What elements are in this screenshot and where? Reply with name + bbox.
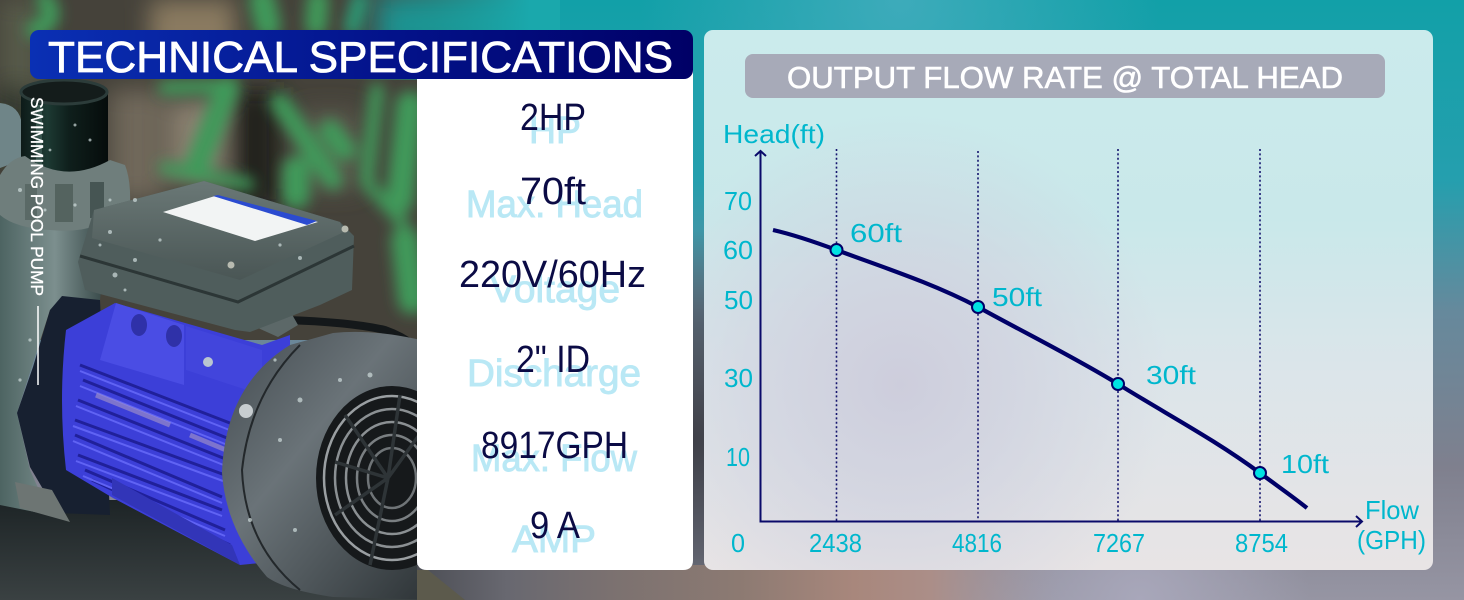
spec row: amperage: AMP xyxy=(512,519,596,561)
clear strainer lid xyxy=(0,103,22,168)
point labels: 30ft xyxy=(1146,360,1197,390)
cable xyxy=(293,316,410,338)
point labels: 50ft xyxy=(992,282,1043,312)
spec row: voltage: Voltage xyxy=(490,269,620,311)
spec row: amperage: 9 A xyxy=(530,505,581,547)
y axis labels: Head(ft) xyxy=(723,119,825,149)
pump housing xyxy=(0,215,110,515)
cable gland xyxy=(260,316,298,337)
curve data points xyxy=(830,244,1266,479)
spec row: max flow: 8917GPH xyxy=(481,425,628,467)
title banner: TECHNICAL SPECIFICATIONS xyxy=(48,33,673,82)
spec row: discharge: 2" ID xyxy=(516,339,590,381)
performance curve xyxy=(773,230,1307,508)
spec row: max flow: Max. Flow xyxy=(471,438,638,480)
spec row: horsepower: 2HP xyxy=(520,97,586,139)
spec row: max head: 70ft xyxy=(520,171,586,213)
x axis labels: 4816 xyxy=(952,528,1002,558)
photo fade to teal along top xyxy=(340,0,560,80)
x axis labels: (GPH) xyxy=(1357,525,1426,555)
dotted guide lines xyxy=(836,149,1260,521)
motor end cap with fan grille xyxy=(222,332,417,599)
blue motor body xyxy=(62,303,290,565)
spec row: horsepower xyxy=(520,97,586,152)
y axis labels: 30 xyxy=(724,363,753,393)
y axis labels: 0 xyxy=(731,528,745,558)
union ring xyxy=(0,156,130,231)
x axis labels: Flow xyxy=(1365,495,1419,525)
black volute flange xyxy=(17,296,110,515)
spec row: horsepower: HP xyxy=(529,110,581,152)
vertical caption: swimming pool pump: SWIMMING POOL PUMP xyxy=(27,97,47,296)
x axis labels xyxy=(809,495,1426,558)
y axis labels xyxy=(723,119,825,558)
panel: output flow rate chart xyxy=(704,30,1433,570)
ground corner visible below spec panel xyxy=(417,570,465,600)
point labels: 60ft xyxy=(850,218,903,248)
axes with arrows xyxy=(755,151,1362,527)
point labels xyxy=(850,218,1330,479)
y axis labels: 10 xyxy=(726,442,750,472)
photo: swimming pool pump in garden xyxy=(0,0,560,600)
top outlet pipe xyxy=(21,80,108,174)
blurred garden background xyxy=(0,0,560,340)
x axis labels: 7267 xyxy=(1093,528,1145,558)
ground surface xyxy=(0,500,417,600)
spec row: voltage: 220V/60Hz xyxy=(459,254,646,296)
x axis labels: 2438 xyxy=(809,528,862,558)
y axis labels: 60 xyxy=(723,235,753,265)
x axis labels: 8754 xyxy=(1235,528,1288,558)
spec row: max head: Max. Head xyxy=(466,184,643,226)
spec row: discharge: Discharge xyxy=(467,353,641,395)
panel: specification list xyxy=(417,70,693,570)
y axis labels: 50 xyxy=(724,285,753,315)
water droplets xyxy=(18,124,372,532)
chart heading xyxy=(745,54,1385,98)
control box xyxy=(78,181,354,332)
point labels: 10ft xyxy=(1281,449,1330,479)
y axis labels: 70 xyxy=(724,186,752,216)
chart heading: OUTPUT FLOW RATE @ TOTAL HEAD xyxy=(787,60,1343,95)
